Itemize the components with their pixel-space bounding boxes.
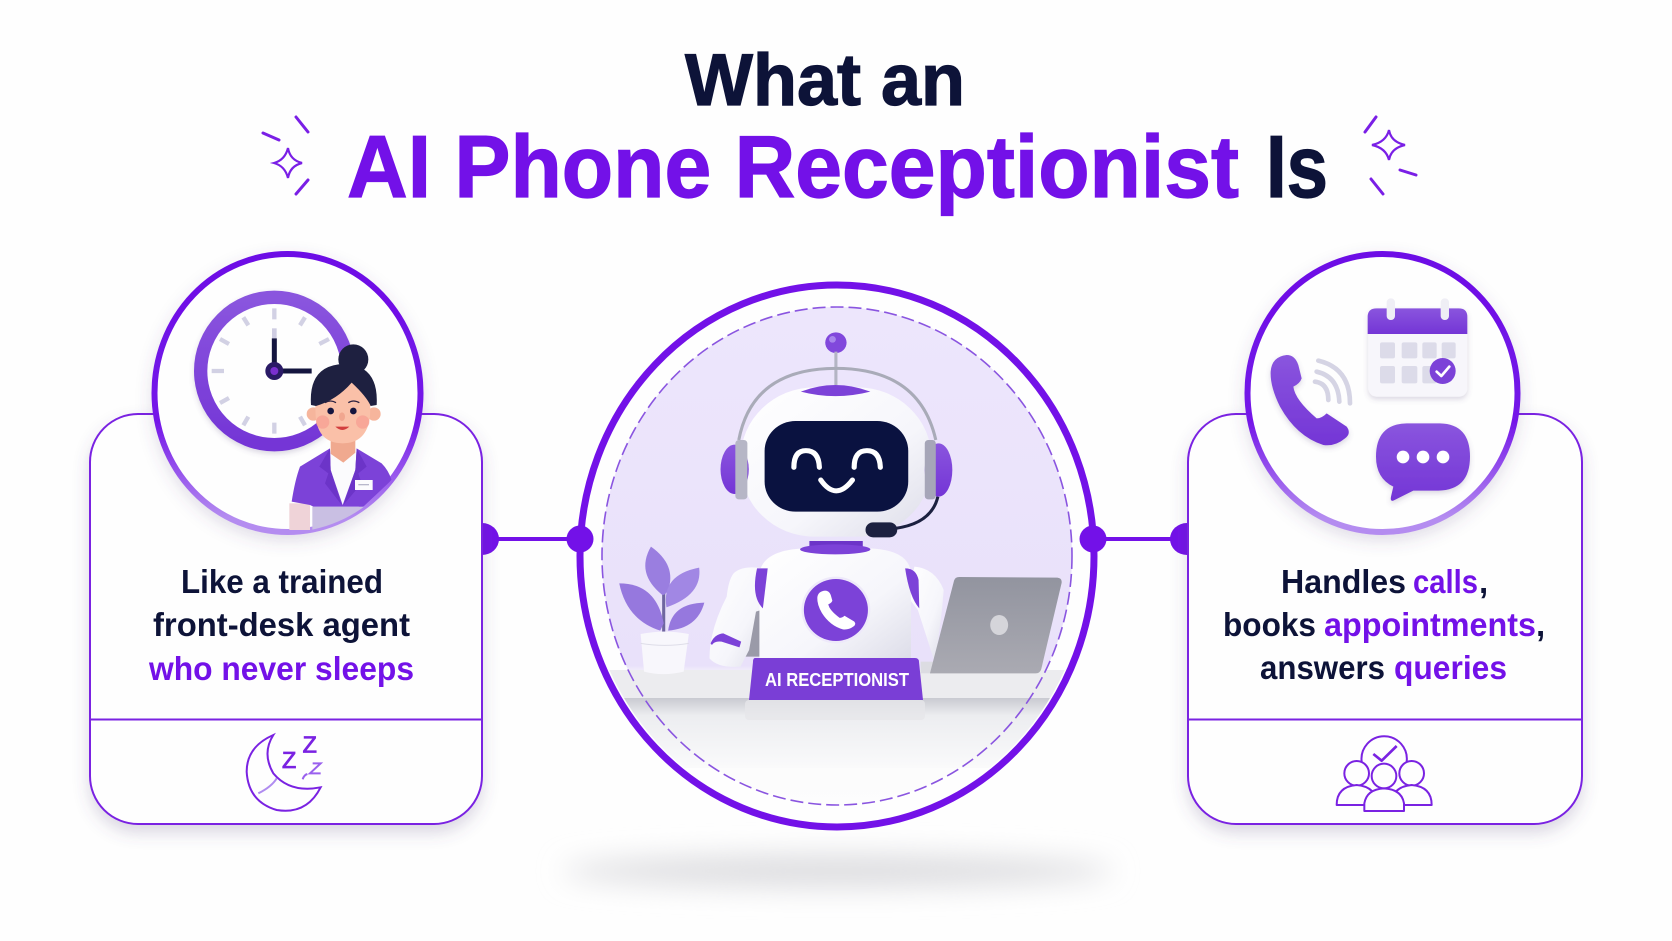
name plate <box>749 658 923 700</box>
left card text: who never sleeps <box>148 650 414 687</box>
right card text: answers <box>1260 649 1385 686</box>
right card text: , <box>1479 563 1488 600</box>
title: What an <box>685 40 965 121</box>
center circle <box>566 285 1106 827</box>
title: AI Phone Receptionist <box>347 117 1239 216</box>
left card text: Like a trained <box>181 563 383 600</box>
name plate: AI RECEPTIONIST <box>765 670 909 690</box>
right card text: appointments <box>1324 606 1536 643</box>
panel: right card <box>1188 414 1582 824</box>
icon: team with check <box>1337 736 1432 811</box>
sparkles left <box>263 117 308 194</box>
desk <box>610 670 1064 752</box>
left circle <box>154 254 420 532</box>
right card text: books <box>1223 606 1316 643</box>
receptionist woman <box>289 344 392 530</box>
connector left <box>482 523 580 555</box>
divider right <box>1188 718 1582 720</box>
panel: left card <box>90 414 482 824</box>
robot head <box>721 332 952 537</box>
ground shadow <box>563 855 1113 887</box>
title: Is <box>1266 117 1328 216</box>
right card text <box>1223 563 1545 686</box>
plant <box>619 547 704 674</box>
node left <box>566 526 594 552</box>
icon: phone handset with signal <box>1271 355 1350 445</box>
dashed inner ring <box>602 307 1072 805</box>
title <box>347 40 1328 216</box>
icon: moon with z: Z <box>303 732 317 758</box>
icon: wall clock <box>201 297 348 445</box>
connector right <box>1093 523 1187 555</box>
icon: moon with z: Z <box>282 747 296 773</box>
sparkles right <box>1365 117 1416 194</box>
icon: calendar <box>1368 298 1467 397</box>
robot body <box>709 541 944 667</box>
divider left <box>90 718 482 720</box>
icon: chat bubble <box>1376 423 1470 501</box>
left card text <box>148 563 414 687</box>
right card text: queries <box>1394 649 1507 686</box>
left card text: front-desk agent <box>153 606 410 643</box>
icon: moon with z <box>247 732 321 811</box>
node right <box>1080 526 1106 552</box>
right card text: , <box>1536 606 1545 643</box>
right card text: Handles <box>1281 563 1406 600</box>
lavender inner disc <box>602 307 1072 805</box>
right circle <box>1248 254 1518 532</box>
right card text: calls <box>1413 563 1478 600</box>
laptop <box>921 577 1062 673</box>
